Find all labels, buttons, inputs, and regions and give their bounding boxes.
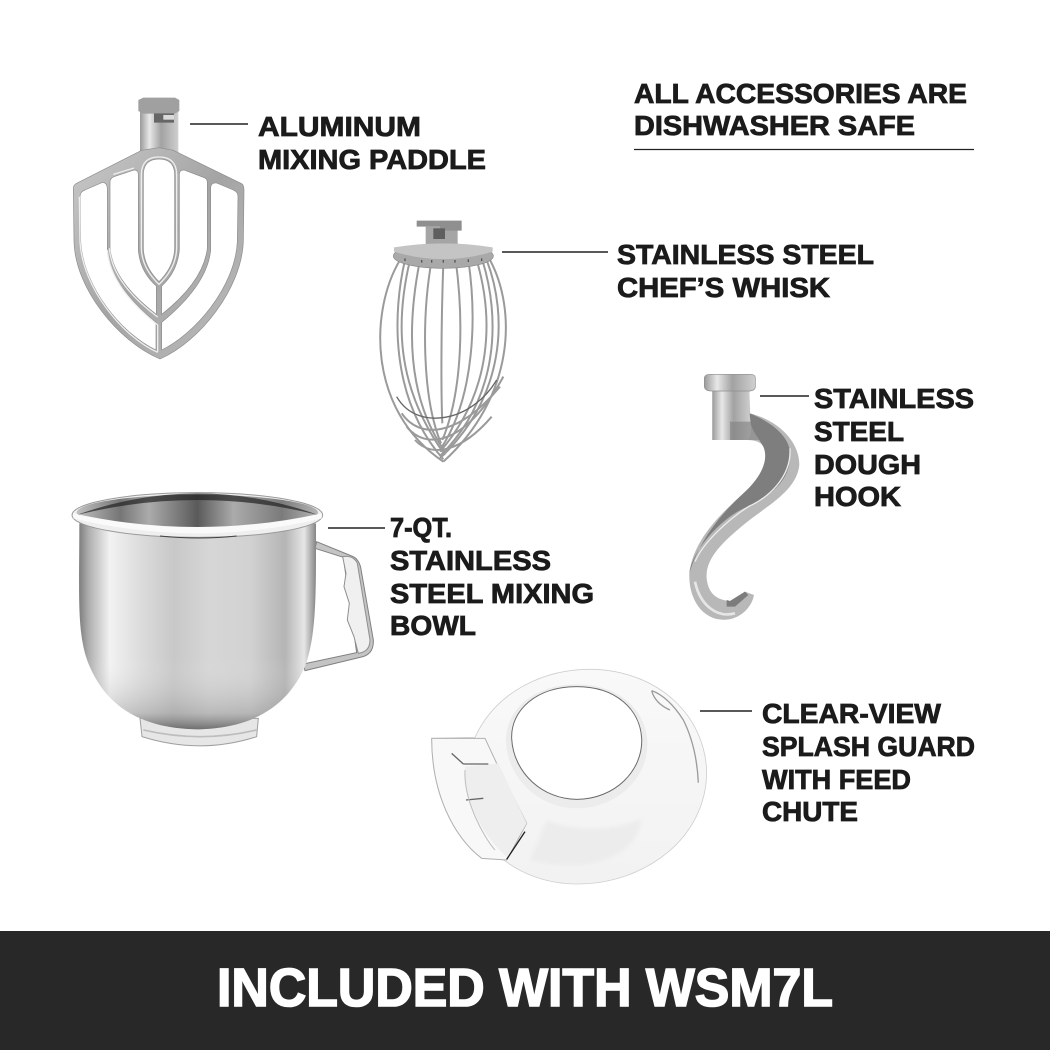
- label: dough hook: HOOK: [814, 481, 901, 512]
- foot: [140, 718, 258, 746]
- label: mixing bowl: [390, 512, 594, 641]
- label: chef's whisk: STAINLESS STEEL: [617, 239, 874, 270]
- label: mixing bowl: STEEL MIXING: [390, 578, 594, 609]
- leader line: paddle: [190, 123, 248, 125]
- label: mixing bowl: 7-QT.: [390, 512, 452, 543]
- banner heading: INCLUDED WITH WSM7L: [217, 958, 833, 1018]
- label: chef's whisk: [617, 239, 874, 303]
- leader line: bowl: [328, 527, 385, 529]
- label: dough hook: STAINLESS: [814, 383, 974, 414]
- label: splash guard: CLEAR-VIEW: [762, 698, 941, 729]
- body: [79, 523, 316, 729]
- label: chef's whisk: CHEF’S WHISK: [617, 272, 830, 303]
- icon: stainless steel chef's whisk: [380, 221, 506, 462]
- icon: 7-qt stainless steel mixing bowl: [72, 493, 373, 746]
- interior: [77, 495, 318, 531]
- label: splash guard: WITH FEED: [762, 764, 911, 795]
- note: dishwasher safe: [634, 78, 974, 150]
- label: dough hook: STEEL: [814, 416, 904, 447]
- leader line: dough hook: [760, 395, 809, 397]
- leader line: whisk: [502, 251, 608, 253]
- label: aluminum mixing paddle: [258, 111, 486, 175]
- label: dough hook: DOUGH: [814, 449, 921, 480]
- footer banner: [0, 931, 1050, 1050]
- label: splash guard: CHUTE: [762, 796, 858, 827]
- leader line: splash guard: [700, 710, 752, 712]
- note: dishwasher safe: DISHWASHER SAFE: [634, 110, 915, 141]
- icon: aluminum mixing paddle: [73, 98, 244, 359]
- label: dough hook: [814, 383, 974, 512]
- label: splash guard: [762, 698, 975, 827]
- label: mixing bowl: STAINLESS: [390, 545, 551, 576]
- label: mixing bowl: BOWL: [390, 610, 476, 641]
- label: aluminum mixing paddle: MIXING PADDLE: [258, 144, 486, 175]
- rim: [72, 493, 323, 537]
- label: aluminum mixing paddle: ALUMINUM: [258, 111, 421, 142]
- note: dishwasher safe: ALL ACCESSORIES ARE: [634, 78, 967, 109]
- icon: stainless steel dough hook: [689, 374, 799, 620]
- handle: [303, 542, 373, 671]
- icon: clear-view splash guard with feed chute: [432, 669, 707, 884]
- label: splash guard: SPLASH GUARD: [762, 731, 975, 762]
